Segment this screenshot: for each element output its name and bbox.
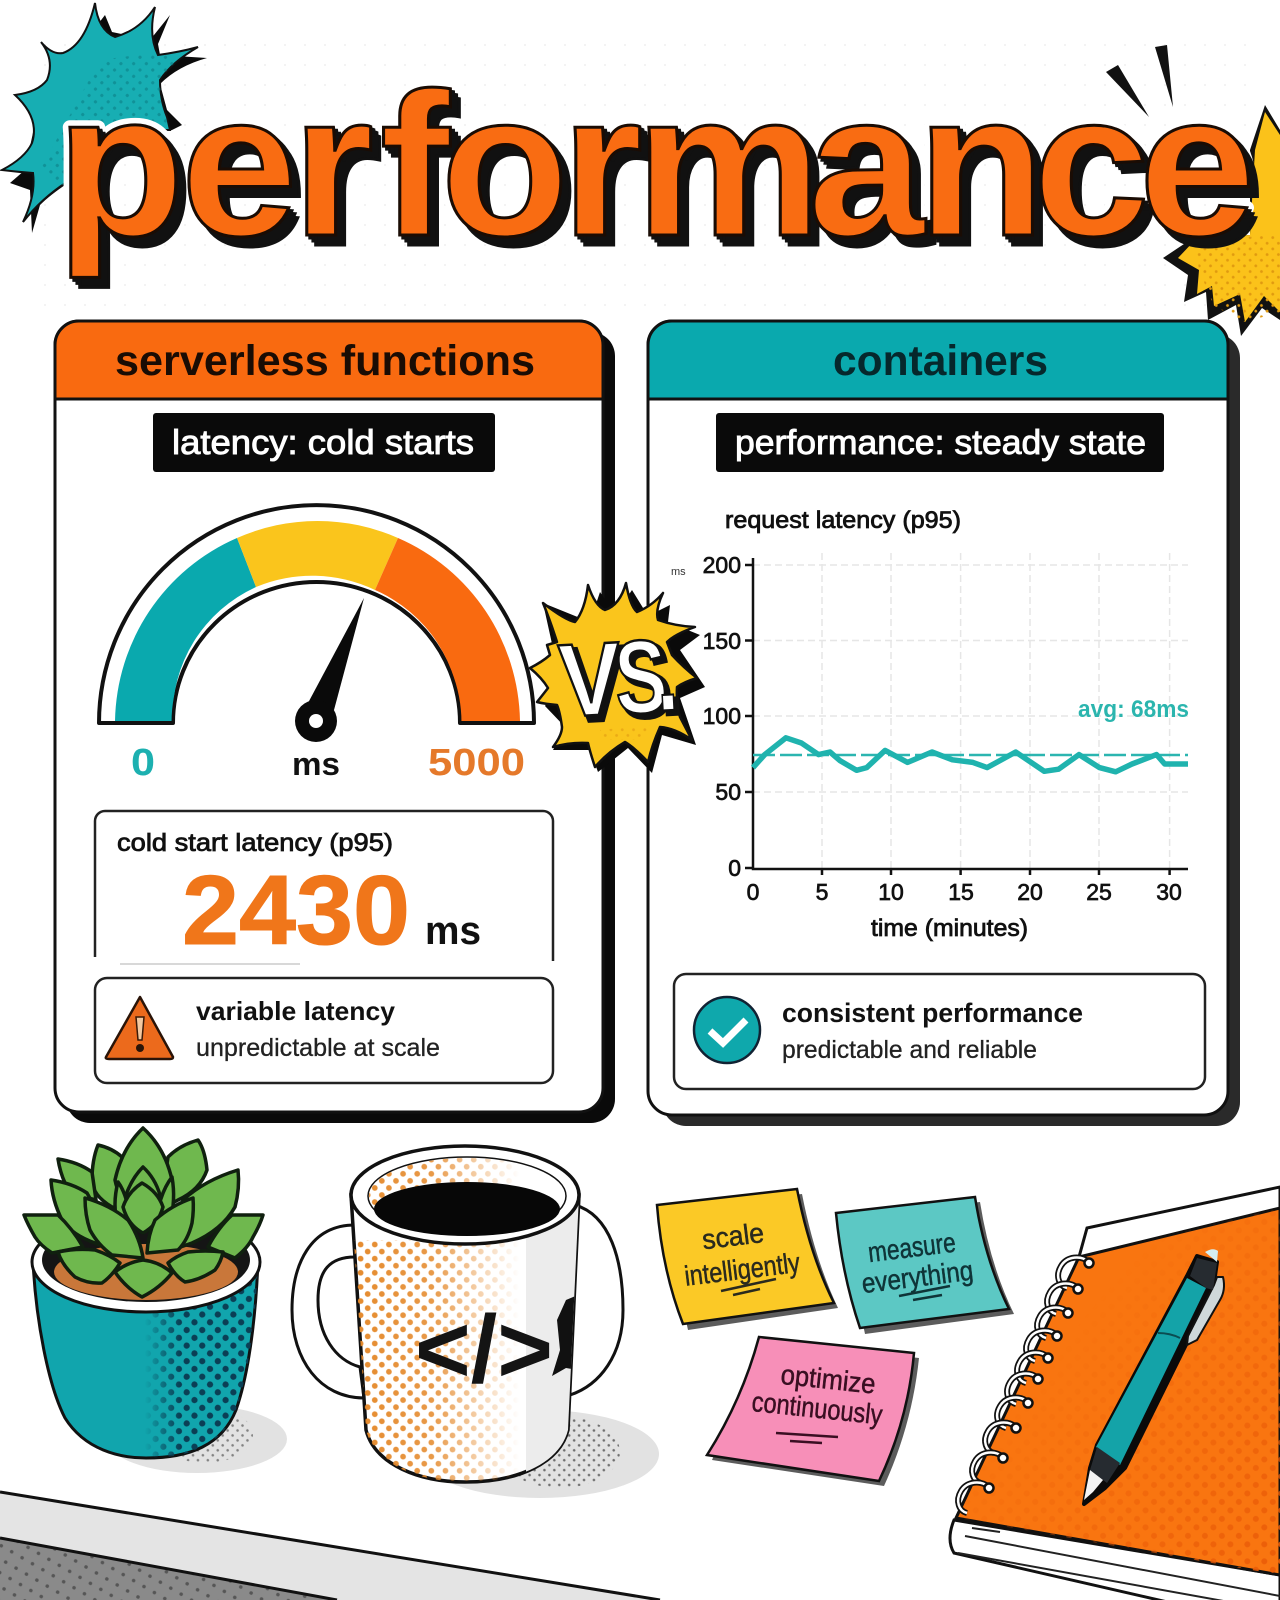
title: performance [62, 57, 1262, 284]
x axis labels: 10 [878, 879, 904, 905]
panel body [55, 321, 603, 1112]
mug rim [351, 1146, 579, 1244]
succulent leaves [24, 1128, 263, 1297]
average label: avg: 68ms [1078, 696, 1189, 723]
sticky note: optimize continuously: optimize [779, 1359, 877, 1400]
vs text: V [556, 621, 624, 740]
callout: consistent performance: consistent performance [782, 998, 1083, 1028]
notebook spiral [958, 1257, 1094, 1513]
gauge needle [295, 598, 364, 742]
latency series line [753, 738, 1188, 772]
panel shadow [662, 334, 1240, 1126]
notebook pages [950, 1187, 1280, 1600]
burst: yellow right [1163, 105, 1280, 336]
chart title: request latency (p95) [725, 507, 961, 534]
icon: check circle [694, 997, 760, 1063]
subheading label: performance: steady state [735, 424, 1146, 462]
vs text: . [653, 617, 681, 734]
y axis labels: 0 [728, 855, 741, 881]
panel header [55, 321, 603, 399]
gauge min label: 0 [131, 742, 155, 784]
mug body [350, 1195, 585, 1490]
title: performance [56, 51, 1256, 278]
heading: containers [833, 337, 1048, 385]
panel: containers [648, 321, 1240, 1126]
sticky note: scale intelligently: scale [700, 1217, 766, 1255]
soil [42, 1218, 250, 1302]
x axis labels: 30 [1156, 879, 1182, 905]
subheading label [153, 413, 495, 472]
plant: succulent in teal pot [24, 1128, 287, 1473]
title: performance [65, 61, 1265, 288]
pot rim [32, 1212, 260, 1312]
x axis labels: 5 [816, 879, 828, 905]
heading: serverless functions [115, 337, 535, 385]
vs burst [530, 583, 705, 773]
panel shadow [66, 332, 615, 1123]
burst: teal top left [2, 3, 207, 233]
background dot grid [30, 35, 1255, 320]
vs text: S [612, 618, 670, 737]
title: performance [56, 51, 1256, 278]
panel header [648, 321, 1228, 399]
average dashed line [753, 754, 1188, 756]
mug: code coffee mug [292, 1146, 659, 1498]
sticky note: scale intelligently: intelligently [683, 1247, 802, 1292]
callout: variable latency [95, 978, 553, 1083]
vs text: S [616, 622, 674, 741]
sticky note: measure everything [836, 1197, 1014, 1334]
stat box: cold start latency: 2430 [182, 855, 410, 965]
vs text: . [657, 621, 685, 738]
stat box: cold start latency: ms [425, 909, 481, 953]
title: performance [59, 54, 1259, 281]
y axis labels: 150 [703, 628, 741, 654]
subheading label: latency: cold starts [172, 424, 474, 462]
right handle [570, 1205, 623, 1395]
x axis labels: 20 [1017, 879, 1043, 905]
sticky note: scale intelligently [657, 1189, 838, 1330]
sticky note: measure everything: everything [860, 1255, 975, 1299]
x axis labels: 25 [1086, 879, 1112, 905]
y axis labels: 200 [703, 552, 741, 578]
left handle [292, 1225, 364, 1398]
x axis labels: 15 [948, 879, 974, 905]
line chart: request latency [671, 507, 1189, 942]
y axis labels: 50 [715, 779, 741, 805]
icon: warning triangle [106, 997, 173, 1059]
gauge unit label: ms [292, 746, 340, 782]
gauge [99, 505, 534, 742]
y axis labels [703, 552, 741, 881]
notebook [950, 1187, 1280, 1600]
mug code symbol: </> [415, 1296, 553, 1403]
coffee [374, 1182, 560, 1236]
callout: variable latency: unpredictable at scale [196, 1034, 440, 1062]
vs text [556, 617, 685, 745]
desk edge [0, 1492, 660, 1600]
axis artefacts: ms [671, 566, 686, 578]
subheading label [716, 413, 1164, 472]
x axis labels: 0 [747, 879, 759, 905]
mug inner wall [368, 1157, 566, 1235]
callout: consistent performance [674, 974, 1205, 1089]
notebook cover [956, 1208, 1280, 1575]
sticky note: optimize continuously: continuously [750, 1386, 884, 1430]
mug shadow [421, 1410, 659, 1498]
pot body [32, 1269, 259, 1460]
callout: variable latency: variable latency [196, 996, 396, 1026]
stat box: cold start latency: cold start latency (p95) [117, 829, 393, 857]
vs text: V [560, 626, 628, 745]
callout: consistent performance: predictable and reliable [782, 1036, 1037, 1064]
x axis title: time (minutes) [871, 915, 1028, 942]
stat box: cold start latency [95, 811, 553, 965]
icon: black action marks [1106, 45, 1173, 117]
pen [1084, 1249, 1224, 1504]
x axis labels [747, 879, 1182, 905]
panel: serverless functions [55, 321, 615, 1123]
pot shadow [107, 1405, 287, 1473]
panel body [648, 321, 1228, 1115]
sticky note: optimize continuously [707, 1337, 919, 1486]
axes [745, 558, 1188, 875]
sticky note: measure everything: measure [866, 1227, 957, 1268]
gauge max label: 5000 [428, 742, 525, 784]
y axis labels: 100 [703, 703, 741, 729]
